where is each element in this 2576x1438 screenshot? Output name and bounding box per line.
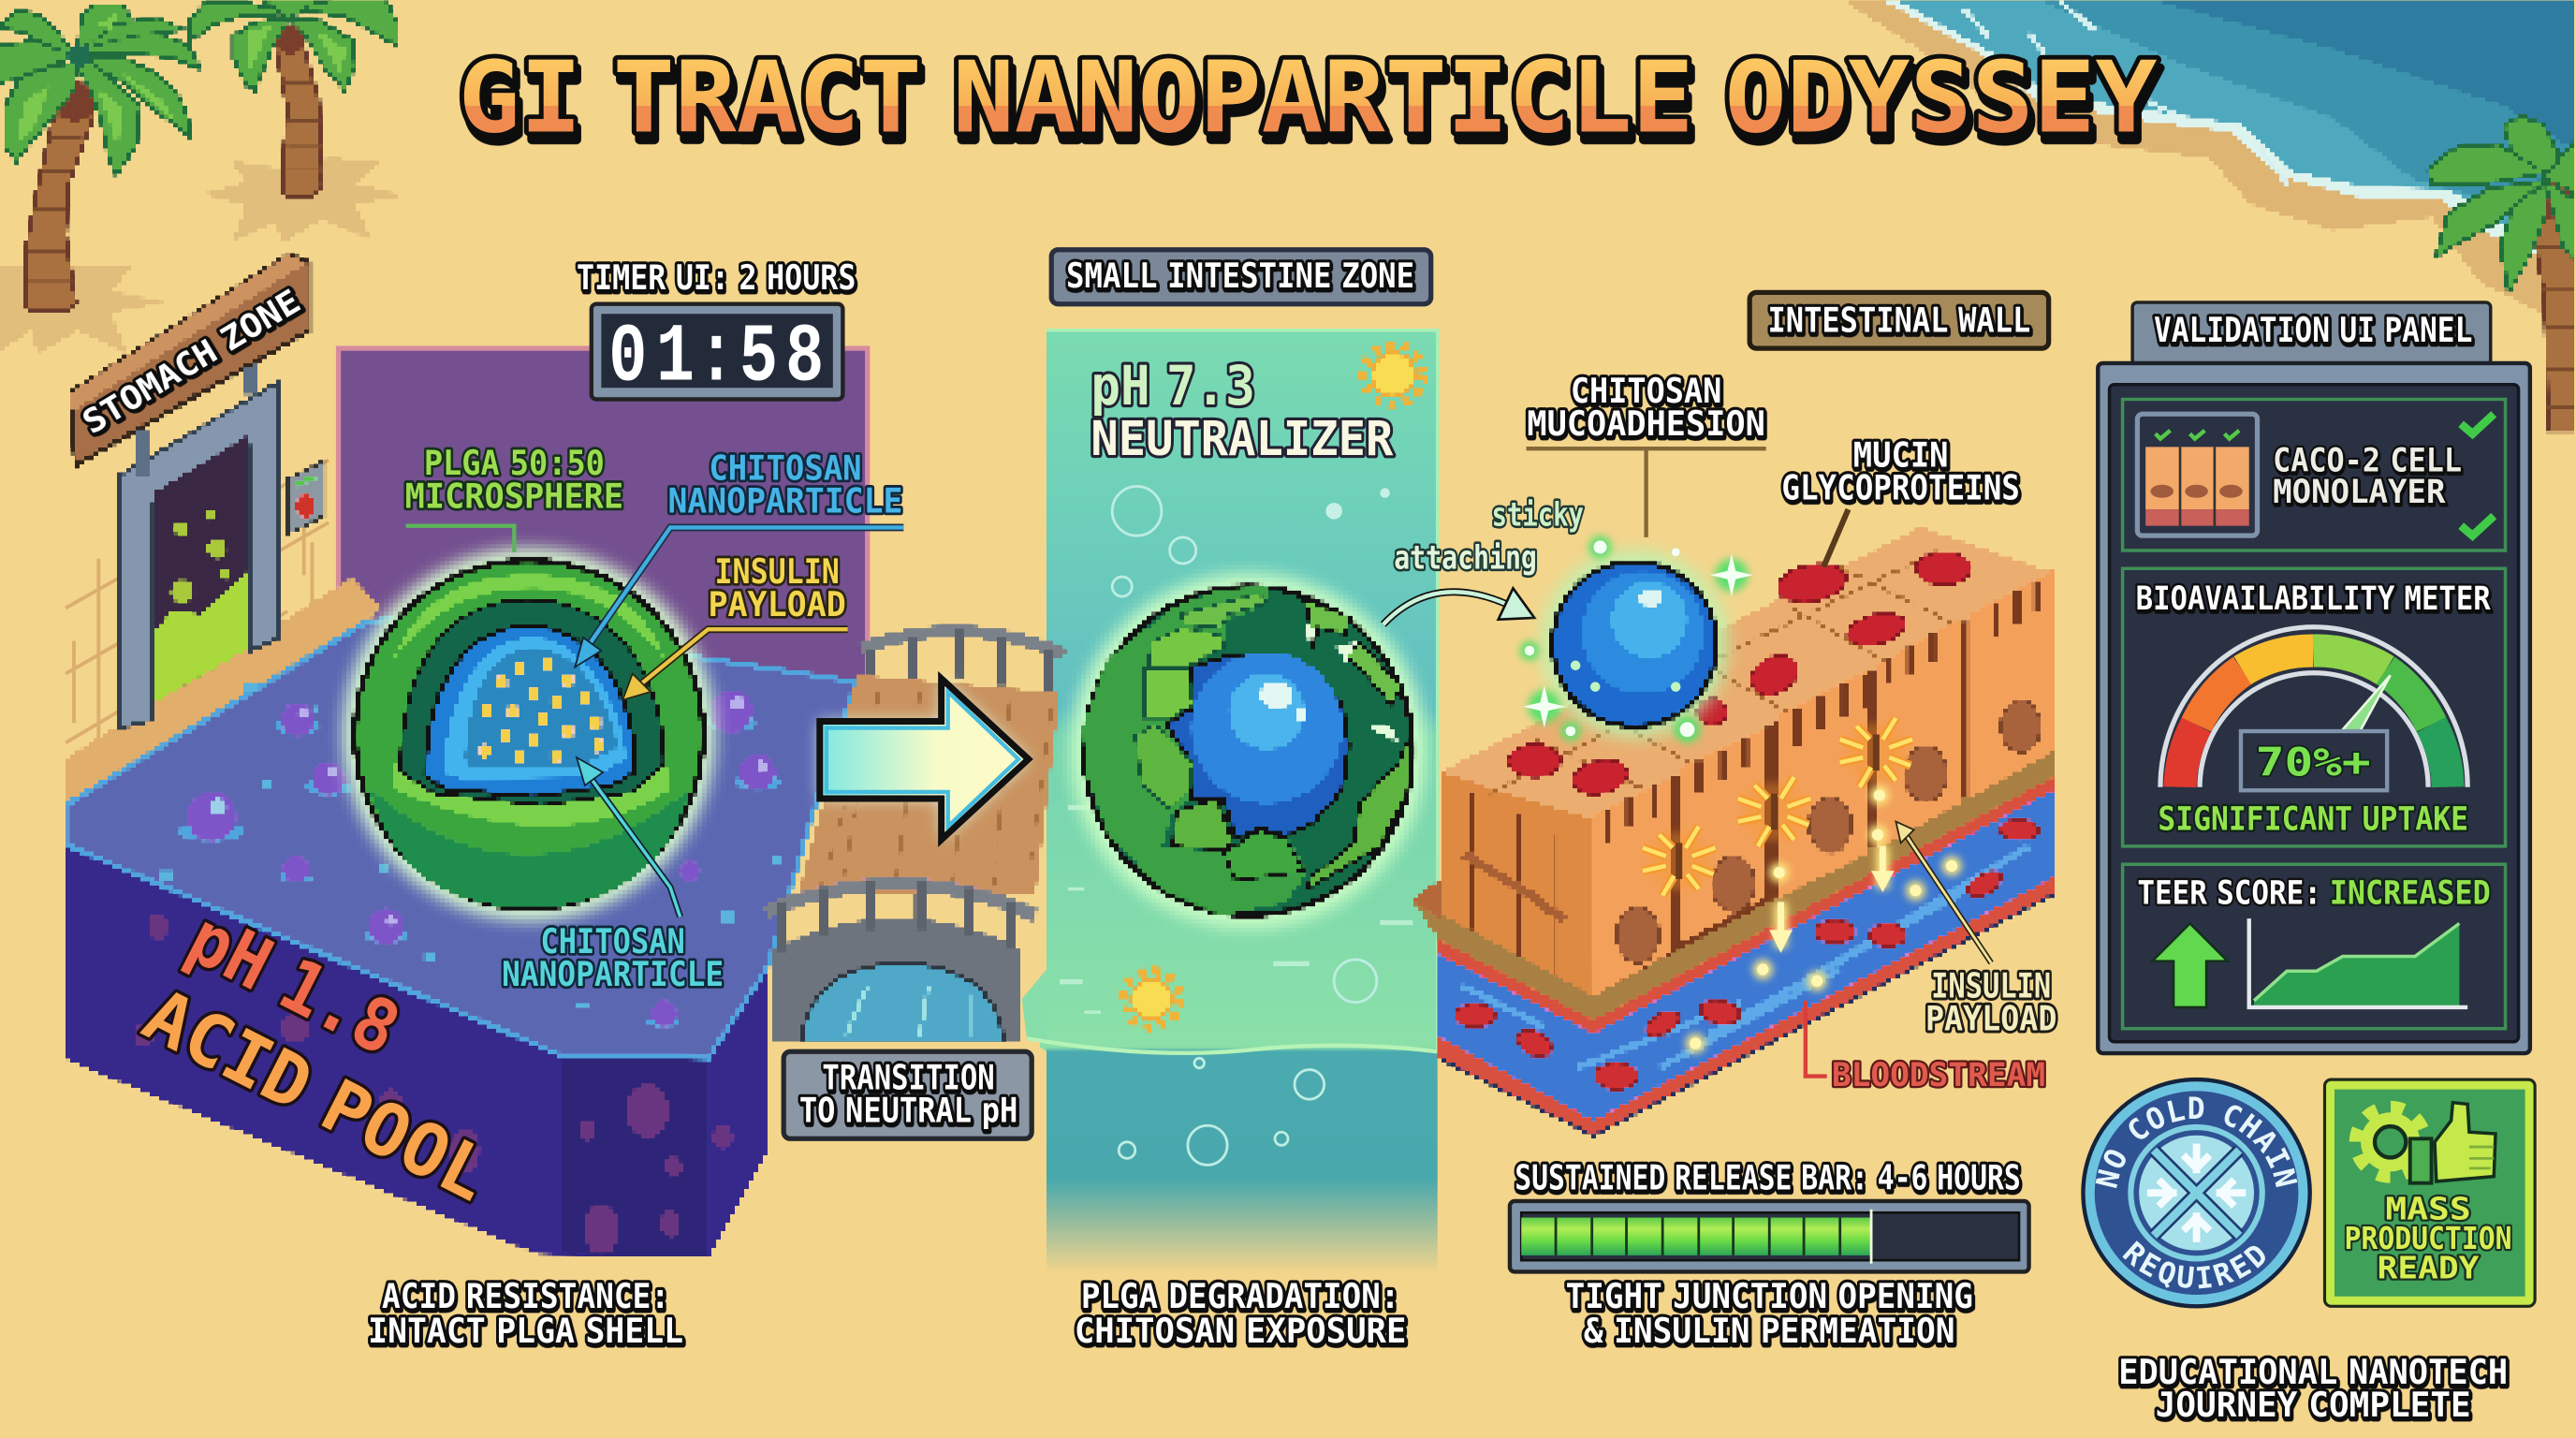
- panel: intestinal wall cell block: [1412, 527, 2054, 1136]
- gauge needle: [2343, 675, 2391, 733]
- shell crack gaps: [1305, 624, 1398, 742]
- sign posts: [143, 353, 250, 477]
- tight junction sparks: [1643, 718, 1912, 896]
- palm shadow left: [0, 265, 163, 353]
- section: bioavailability meter: SIGNIFICANT UPTAKE: [2158, 800, 2468, 838]
- microsphere: intact PLGA shell with cutaway: [344, 549, 714, 920]
- cell gaps backing: [1593, 574, 2054, 996]
- label: chitosan nanoparticle lower: [502, 757, 724, 994]
- sustained release progress bar: [1510, 1201, 2029, 1271]
- label: sustained release: SUSTAINED RELEASE BAR: 4-6 HOURS: [1515, 1158, 2021, 1198]
- panel: small intestine zone: [1022, 330, 1438, 1273]
- pool wall bubbles: [135, 914, 733, 1254]
- mucin glycoproteins: [1508, 552, 1971, 800]
- pool label: pH 1.8 acid pool: ACID POOL: [131, 973, 503, 1218]
- crossed out snowflake: [2130, 1127, 2262, 1258]
- section: Caco-2 monolayer: [2123, 399, 2506, 550]
- wall warning plate: [287, 462, 324, 534]
- caption: PLGA degradation: [1075, 1276, 1406, 1351]
- bridge: [766, 629, 1064, 1042]
- caption: tight junction opening: TIGHT JUNCTION OPENING: [1566, 1276, 1973, 1316]
- section: Caco-2 monolayer: MONOLAYER: [2273, 473, 2446, 511]
- transition label: TO NEUTRAL pH: [799, 1091, 1017, 1131]
- label: insulin payload wall: INSULIN: [1931, 965, 2051, 1005]
- label: bloodstream: [1806, 1001, 2045, 1094]
- label: chitosan nanoparticle lower: CHITOSAN: [540, 921, 685, 961]
- label: mucin glycoproteins: MUCIN: [1853, 434, 1949, 475]
- water under arch: [801, 962, 1003, 1042]
- title: GI TRACT NANOPARTICLE ODYSSEY: [459, 39, 2157, 154]
- transition label: [772, 1042, 1040, 1153]
- icon: sun bottom: [1123, 971, 1179, 1027]
- intestinal wall tag: [1749, 292, 2049, 348]
- section: TEER score: INCREASED: [2330, 873, 2491, 912]
- caption: PLGA degradation: PLGA DEGRADATION:: [1081, 1276, 1399, 1316]
- gauge: 70%+: [2256, 739, 2371, 785]
- badge: mass production ready: READY: [2378, 1249, 2479, 1285]
- label: sticky: sticky: [1492, 496, 1584, 535]
- microsphere: degrading PLGA shell: [1071, 574, 1426, 929]
- label: insulin payload: PAYLOAD: [708, 584, 846, 624]
- closing caption: EDUCATIONAL NANOTECH: [2118, 1352, 2508, 1392]
- label: PLGA microsphere: MICROSPHERE: [405, 476, 623, 516]
- small intestine zone tag: [1051, 250, 1431, 304]
- pool side wall: [64, 844, 768, 1257]
- badge: no cold chain required: [2081, 1077, 2312, 1309]
- chitosan nanoparticle attaching to wall: [1541, 550, 1728, 738]
- icon: thumbs up with cuff: [2410, 1103, 2496, 1183]
- label: chitosan nanoparticle upper: CHITOSAN: [709, 448, 862, 488]
- pool label: pH 1.8 acid pool: pH 1.8: [175, 896, 412, 1072]
- label: mucin glycoproteins: [1781, 434, 2020, 567]
- label: insulin payload: INSULIN: [714, 551, 840, 592]
- label: insulin payload: [622, 551, 848, 700]
- sign text: STOMACH ZONE: [76, 282, 307, 442]
- acid surface bubbles: [179, 690, 781, 1027]
- palm tree right: [2428, 117, 2576, 431]
- heading: pH 7.3 neutralizer: [1090, 354, 1394, 467]
- broken shell plates: [1135, 594, 1412, 889]
- gauge value: [2241, 731, 2387, 790]
- label: insulin payload wall: [1895, 822, 2056, 1038]
- closing caption: [2118, 1352, 2508, 1425]
- left cell face: [1441, 772, 1593, 996]
- insulin payload core: [465, 648, 618, 768]
- caption: acid resistance: ACID RESISTANCE:: [382, 1276, 669, 1316]
- closing caption: JOURNEY COMPLETE: [2156, 1385, 2471, 1425]
- section: TEER score: TEER SCORE:: [2137, 873, 2321, 912]
- panel tab: [2132, 302, 2491, 365]
- caption: tight junction opening: [1566, 1276, 1973, 1351]
- palm tree middle: [189, 0, 398, 196]
- panel: validation UI: [2098, 302, 2530, 1053]
- green sparkles around the nanoparticle: [1519, 536, 1753, 742]
- near railing: [766, 884, 1035, 916]
- palm shadow middle: [204, 157, 402, 242]
- sign: stomach gate: [70, 255, 324, 728]
- front cells: [1593, 570, 2054, 996]
- shell lower rim: [394, 759, 670, 826]
- badge: no cold chain required: NO COLD CHAIN: [2095, 1097, 2297, 1189]
- nuclei: [1617, 700, 2041, 962]
- label: insulin payload wall: PAYLOAD: [1925, 998, 2056, 1038]
- gate interior: [153, 433, 250, 703]
- badge: mass production ready: PRODUCTION: [2345, 1220, 2512, 1256]
- section: TEER score: [2123, 864, 2506, 1029]
- intestinal wall tag: INTESTINAL WALL: [1767, 301, 2030, 341]
- label: attaching: attaching: [1394, 538, 1537, 577]
- panel frame: [2098, 363, 2530, 1053]
- bubbles: [1112, 487, 1377, 1165]
- microvilli: [1608, 580, 2037, 843]
- label: PLGA microsphere: [405, 443, 623, 552]
- ocean in the top right corner: [1843, 0, 2576, 329]
- timer label: TIMER UI: 2 HOURS: [577, 257, 856, 298]
- label: mucin glycoproteins: GLYCOPROTEINS: [1781, 468, 2020, 508]
- brick wall beside the gate: [66, 460, 329, 742]
- pool surface: [66, 611, 856, 1058]
- heading: pH 7.3 neutralizer: NEUTRALIZER: [1090, 412, 1394, 467]
- icon: gear: [2356, 1108, 2425, 1177]
- panel: stomach back wall: [339, 348, 868, 726]
- caption: acid resistance: [368, 1276, 683, 1351]
- bloodstream: [1439, 777, 2054, 1136]
- small intestine zone tag: SMALL INTESTINE ZONE: [1066, 256, 1414, 296]
- surface droplets: [161, 682, 782, 1009]
- TEER area chart: [2249, 918, 2467, 1007]
- label: chitosan mucoadhesion: MUCOADHESION: [1527, 404, 1765, 444]
- arrow: attaching: [1383, 588, 1534, 624]
- heading: pH 7.3 neutralizer: pH 7.3: [1090, 354, 1255, 418]
- gate frame: [118, 383, 278, 728]
- caption: tight junction opening: & INSULIN PERMEATION: [1584, 1311, 1955, 1351]
- chitosan nanoparticle dome: [426, 626, 636, 797]
- label: chitosan mucoadhesion: [1526, 371, 1766, 537]
- label: chitosan nanoparticle upper: [575, 448, 903, 668]
- section: bioavailability meter: [2123, 568, 2506, 846]
- badge: mass production ready: MASS: [2385, 1190, 2471, 1226]
- label: chitosan nanoparticle lower: NANOPARTICLE: [502, 954, 724, 994]
- section: Caco-2 monolayer: CACO-2 CELL: [2273, 442, 2462, 480]
- caption: acid resistance: INTACT PLGA SHELL: [368, 1311, 683, 1351]
- badge: no cold chain required: REQUIRED: [2123, 1240, 2265, 1288]
- gauge: [2160, 627, 2467, 790]
- far railing: [861, 631, 1064, 654]
- exposed chitosan core: [1166, 653, 1349, 838]
- icon: cell monolayer: [2137, 414, 2258, 536]
- caption: PLGA degradation: CHITOSAN EXPOSURE: [1075, 1311, 1406, 1351]
- transition label: TRANSITION: [822, 1058, 995, 1098]
- badge: mass production ready: [2324, 1079, 2535, 1306]
- timer display: 01:58: [608, 311, 824, 404]
- wooden deck: [798, 675, 1060, 896]
- label: bloodstream: BLOODSTREAM: [1832, 1056, 2045, 1094]
- label: PLGA microsphere: PLGA 50:50: [424, 443, 605, 483]
- red blood cells: [1456, 820, 2039, 1090]
- label: chitosan mucoadhesion: CHITOSAN: [1571, 371, 1721, 411]
- apical top surface: [1441, 527, 2054, 820]
- panel: validation UI: VALIDATION UI PANEL: [2154, 310, 2472, 350]
- insulin permeation arrows and sparkles: [1686, 785, 1962, 1053]
- label: chitosan nanoparticle upper: NANOPARTICLE: [667, 481, 902, 521]
- sand ledge: [66, 579, 379, 809]
- wooden sign board: [70, 255, 309, 465]
- icon: sun top: [1364, 345, 1423, 404]
- large outer shell plate: [1083, 587, 1308, 916]
- panel: acid pool: [64, 611, 856, 1257]
- check marks: [2461, 414, 2494, 536]
- shell cavity: [401, 600, 664, 805]
- big transition arrow: [820, 679, 1029, 840]
- basement membrane: [1412, 723, 2054, 1020]
- icon: up arrow: [2152, 923, 2228, 1007]
- stone arch: [774, 918, 1022, 1042]
- acid in gate: [153, 568, 250, 703]
- palm tree left: [0, 5, 200, 311]
- section: bioavailability meter: BIOAVAILABILITY METER: [2136, 580, 2491, 618]
